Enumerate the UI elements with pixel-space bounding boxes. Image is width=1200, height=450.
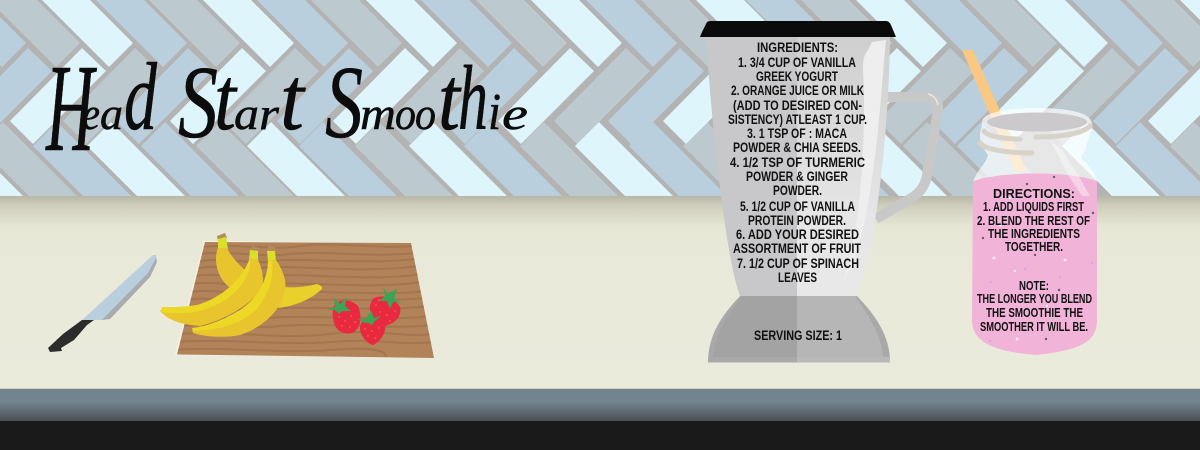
icon: smoothie jar xyxy=(962,50,1097,355)
ingredients list: 2. ORANGE JUICE OR MILK xyxy=(731,83,864,98)
ingredients list: ASSORTMENT OF FRUIT xyxy=(733,241,862,256)
glass highlight xyxy=(1050,140,1090,196)
directions text xyxy=(977,186,1090,254)
ingredients list: INGREDIENTS: xyxy=(757,40,838,55)
blender jar xyxy=(706,37,890,296)
counter front edge xyxy=(0,388,1200,421)
note text: THE SMOOTHIE THE xyxy=(986,305,1083,320)
title: a xyxy=(100,88,123,139)
ingredients list: 3. 1 TSP OF : MACA xyxy=(747,126,847,141)
middle banana xyxy=(160,246,263,326)
straw xyxy=(962,50,1027,172)
title: d xyxy=(124,43,158,150)
title: h xyxy=(458,47,488,149)
directions text: THE INGREDIENTS xyxy=(988,226,1080,241)
ingredients list: 7. 1/2 CUP OF SPINACH xyxy=(737,256,859,271)
note text: NOTE: xyxy=(1019,278,1049,293)
right strawberry xyxy=(370,286,402,326)
title: H xyxy=(45,40,97,178)
icon: knife xyxy=(48,255,157,352)
jar opening xyxy=(987,112,1087,132)
title: r xyxy=(259,88,280,139)
back banana xyxy=(216,233,322,308)
jar rings xyxy=(980,126,1090,153)
herringbone tile backsplash xyxy=(0,0,1200,196)
blender handle xyxy=(876,94,938,219)
title: S xyxy=(178,45,218,160)
title: o xyxy=(395,88,416,139)
middle strawberry xyxy=(358,310,385,345)
title: t xyxy=(214,50,238,149)
ingredients list: POWDER. xyxy=(773,183,822,198)
title: o xyxy=(415,88,436,139)
directions text: 2. BLEND THE REST OF xyxy=(977,213,1090,228)
icon: bananas xyxy=(160,233,322,337)
icon: strawberries xyxy=(327,286,402,345)
dark floor band xyxy=(0,421,1200,450)
title xyxy=(45,40,528,178)
blender lid xyxy=(700,21,896,37)
ingredients list: 4. 1/2 TSP OF TURMERIC xyxy=(730,155,865,170)
pink smoothie xyxy=(972,173,1097,355)
title: S xyxy=(325,45,363,160)
directions text: 1. ADD LIQUIDS FIRST xyxy=(983,199,1084,214)
ingredients list: GREEK YOGURT xyxy=(756,69,839,84)
note text: SMOOTHER IT WILL BE. xyxy=(980,319,1088,334)
ingredients list xyxy=(728,40,867,285)
left strawberry xyxy=(327,297,360,334)
ingredients list: LEAVES xyxy=(778,270,817,285)
ingredients list: 1. 3/4 CUP OF VANILLA xyxy=(738,55,856,70)
blender base xyxy=(708,296,890,362)
smoothie specks xyxy=(982,176,1094,342)
ingredients list: POWDER & GINGER xyxy=(746,169,848,184)
icon: blender xyxy=(700,21,938,362)
title: a xyxy=(234,88,259,139)
note text: THE LONGER YOU BLEND xyxy=(977,291,1092,306)
title: m xyxy=(360,88,396,139)
ingredients list: SISTENCY) ATLEAST 1 CUP. xyxy=(728,112,867,127)
ingredients list: 6. ADD YOUR DESIRED xyxy=(736,227,859,242)
note text xyxy=(977,278,1092,334)
ingredients list: 5. 1/2 CUP OF VANILLA xyxy=(740,199,855,214)
serving size: SERVING SIZE: 1 xyxy=(754,328,842,343)
countertop xyxy=(0,196,1200,388)
title: e xyxy=(502,88,528,139)
ingredients list: POWDER & CHIA SEEDS. xyxy=(733,140,861,155)
title: e xyxy=(82,88,100,139)
directions text: DIRECTIONS: xyxy=(993,186,1075,201)
cutting board xyxy=(175,241,434,358)
ingredients list: PROTEIN POWDER. xyxy=(748,213,846,228)
glass jar xyxy=(973,108,1097,182)
title: t xyxy=(438,50,462,149)
front banana xyxy=(192,246,286,337)
title: t xyxy=(280,50,306,149)
title: i xyxy=(488,84,501,141)
directions text: TOGETHER. xyxy=(1005,239,1063,254)
ingredients list: (ADD TO DESIRED CON- xyxy=(733,98,862,113)
